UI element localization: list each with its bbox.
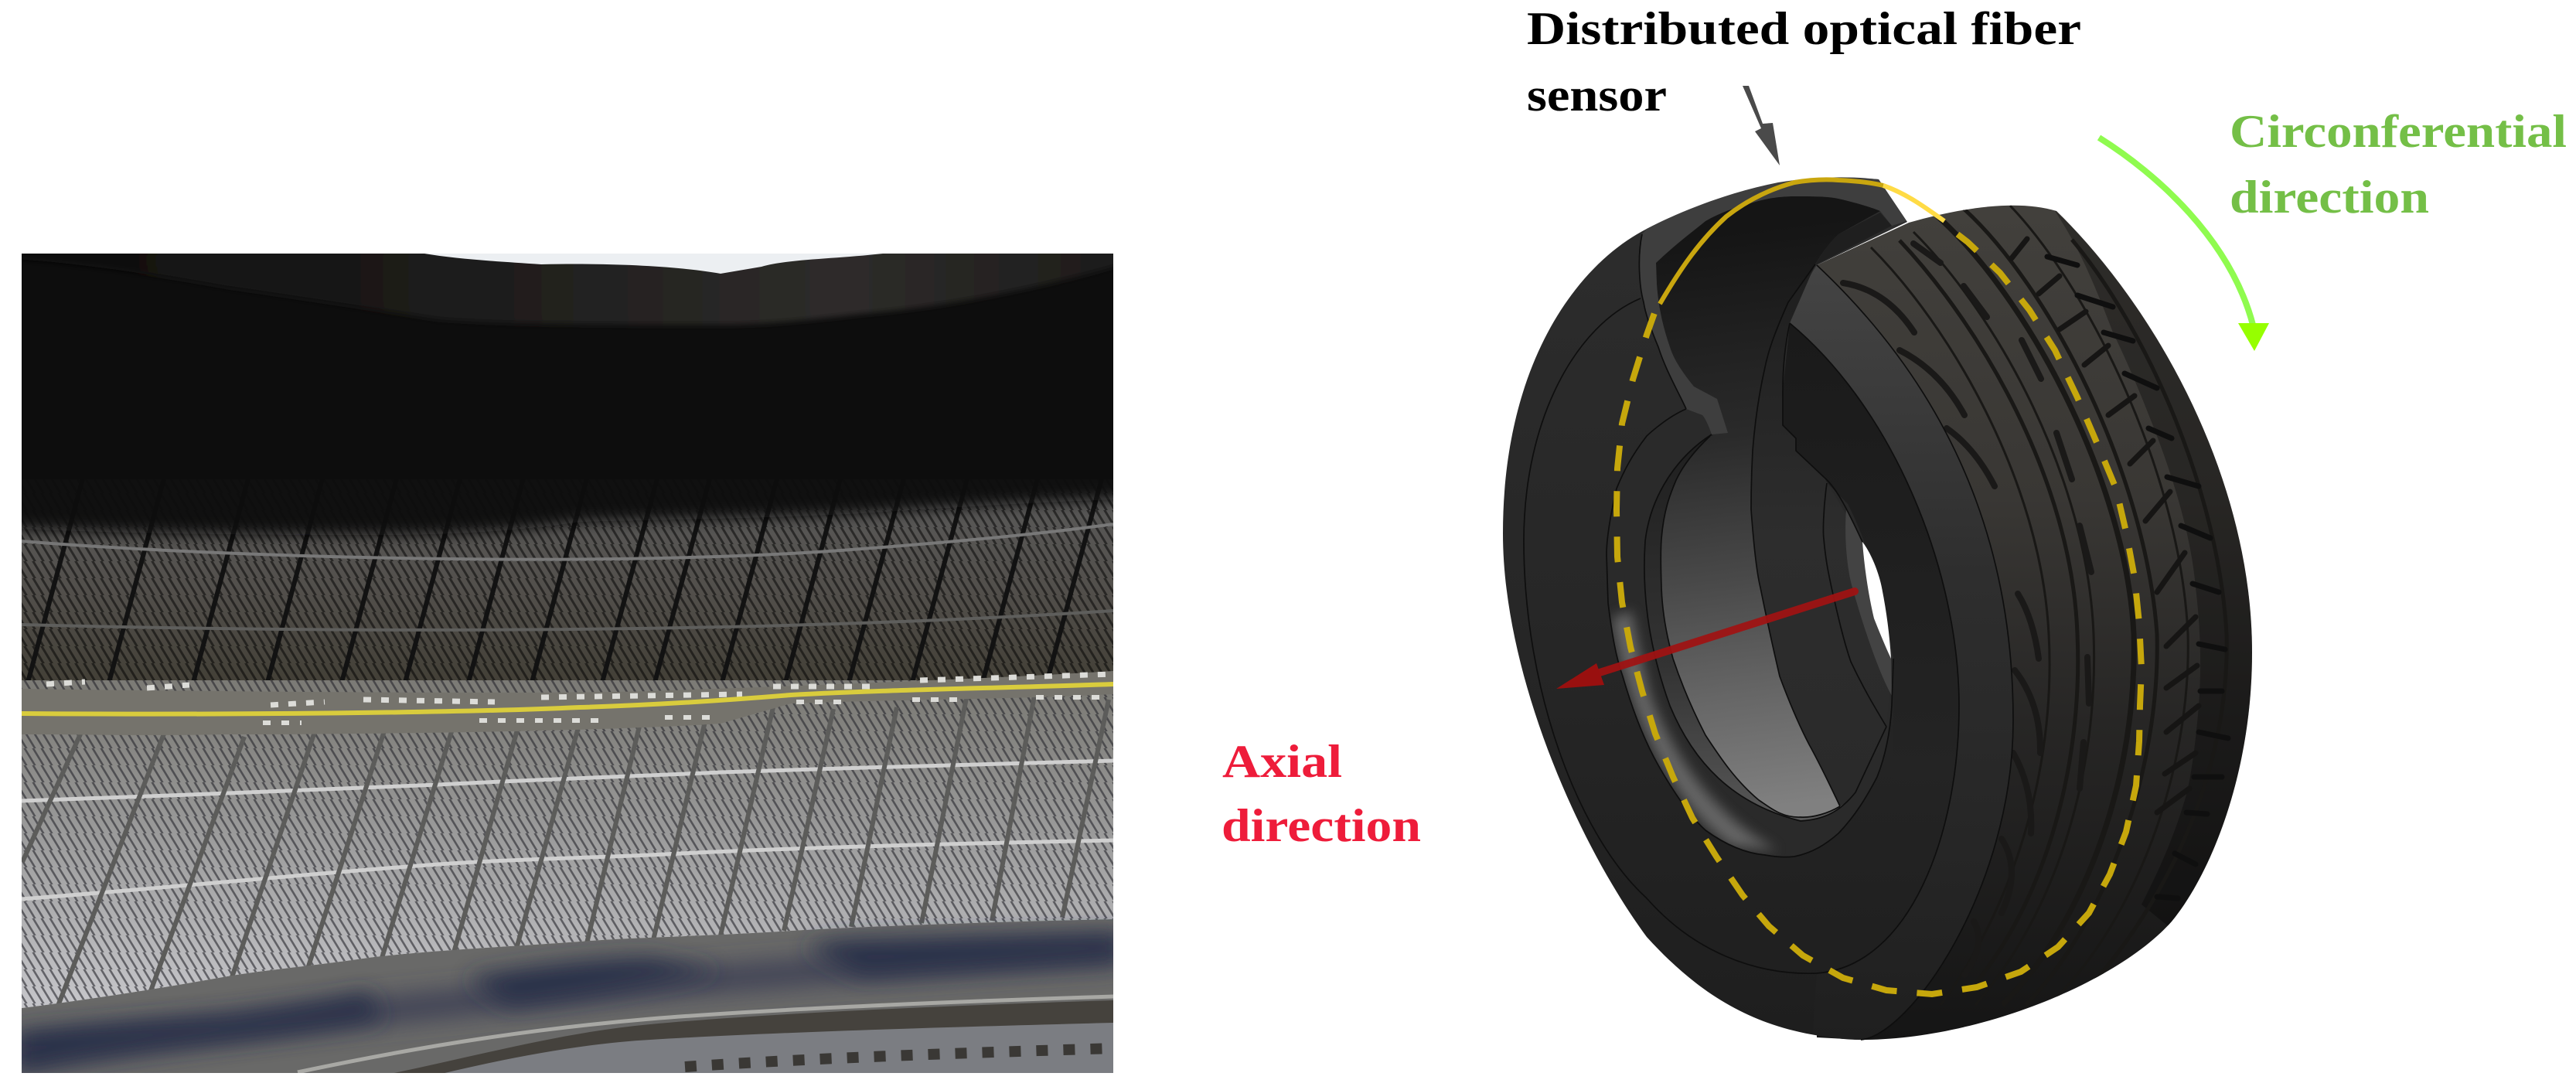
tread outer shoulder marks [2047,257,2228,898]
dark wedge at top of cut [1815,213,1892,265]
photo bright sky sliver [424,254,883,274]
photo bottom bead band [22,919,1113,1075]
photo upper tire lip [139,254,1113,326]
photo bead brown strip [394,1000,1113,1073]
photo bead rim line [298,996,1113,1072]
label: distributed optical fiber sensor: Distributed optical fiber [1527,3,2081,54]
label: axial direction: Axial [1222,736,1342,787]
panel: tire illustration [1503,177,2265,1040]
photo blue reflection patches [15,934,1121,1071]
photo adhesive highlights [46,674,1113,723]
rim flange [1845,509,1892,696]
arrow: circumferential direction [2099,138,2269,351]
label: axial direction [1222,736,1421,851]
cross-section band [1639,177,1906,434]
photo blue reflection band [15,937,1121,1073]
label: axial direction: direction [1222,800,1421,851]
label: distributed optical fiber sensor [1527,3,2081,121]
photo lower ribs [22,694,1109,1006]
fiber solid top section [1660,179,1883,304]
tire interior surface [1656,196,1880,817]
panel: photo of fiber bonded inside tire [0,232,1144,1075]
photo bead lettering marks [685,1048,1113,1067]
inner sidewall dark face [1783,323,1959,780]
photo dark shadow over upper liner [22,479,1113,544]
photo dark base [22,261,1113,479]
photo lower cross lines [22,761,1113,899]
photo yellow optical fiber [22,684,1113,714]
tire outlines [1524,234,2013,1040]
fiber exposed section [1883,186,1944,221]
tire tread [1817,206,2252,1040]
tread central ticks [2012,239,2199,812]
photo lower hatching [22,680,1113,1008]
photo adhesive band [22,671,1113,735]
photo lit lower liner [22,680,1113,1008]
fiber dashed section [1617,234,2142,994]
right interior wall [1751,264,1892,806]
bead ring [1607,409,1893,857]
photo upper ribs [26,490,1101,680]
tread dark outer band [2055,210,2252,926]
label: circumferential direction: direction [2230,172,2429,223]
tread inner curved sipes [1840,240,2094,836]
photo upper liner, lit [22,489,1113,680]
front sidewall [1503,178,2013,1040]
shoulder band [1790,265,2013,1040]
label: circumferential direction [2230,106,2567,223]
hole through tire [1862,542,1891,659]
label: distributed optical fiber sensor: sensor [1527,70,1667,121]
tread details [1843,193,2265,1005]
second inner ring [1644,434,1886,821]
bead ring highlight [1612,611,1778,850]
arrow: axial direction [1556,591,1855,689]
photo metal bead strip [438,1023,1113,1075]
photo upper hatching [22,492,1113,680]
photo upper cross lines [22,524,1113,630]
arrow: sensor pointer [1743,86,1780,165]
tread circumferential grooves [1871,206,2227,1005]
label: circumferential direction: Circonferential [2230,106,2567,157]
